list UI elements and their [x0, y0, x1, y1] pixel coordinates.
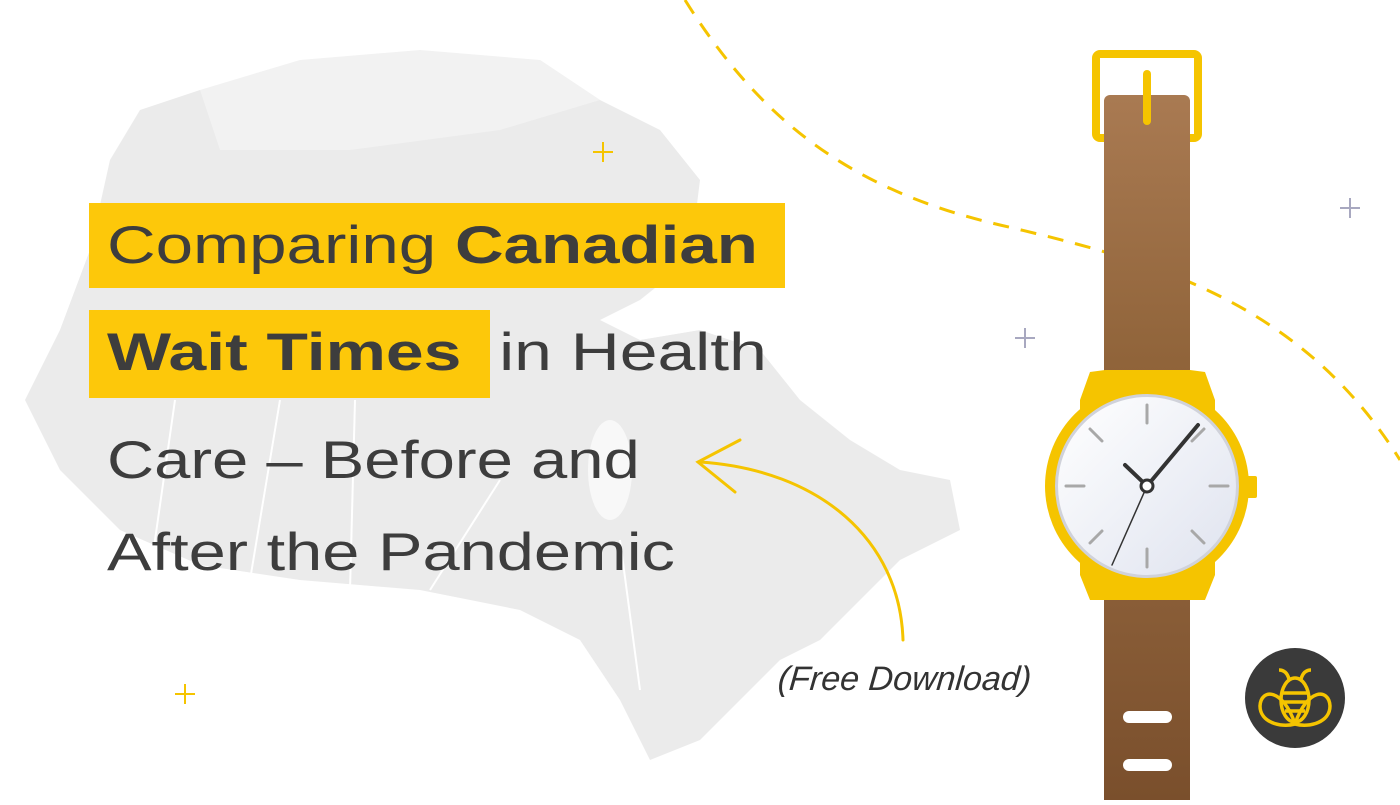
free download label: (Free Download) — [776, 660, 1033, 698]
title highlight box 1 — [89, 203, 785, 288]
title — [89, 203, 785, 582]
title: Wait Times in Health — [107, 323, 767, 382]
title: Comparing Canadian — [107, 216, 758, 275]
title: After the Pandemic — [107, 523, 675, 582]
logo: bee — [1245, 648, 1345, 748]
title highlight box 2 — [89, 310, 490, 398]
title: Care – Before and — [107, 431, 640, 490]
